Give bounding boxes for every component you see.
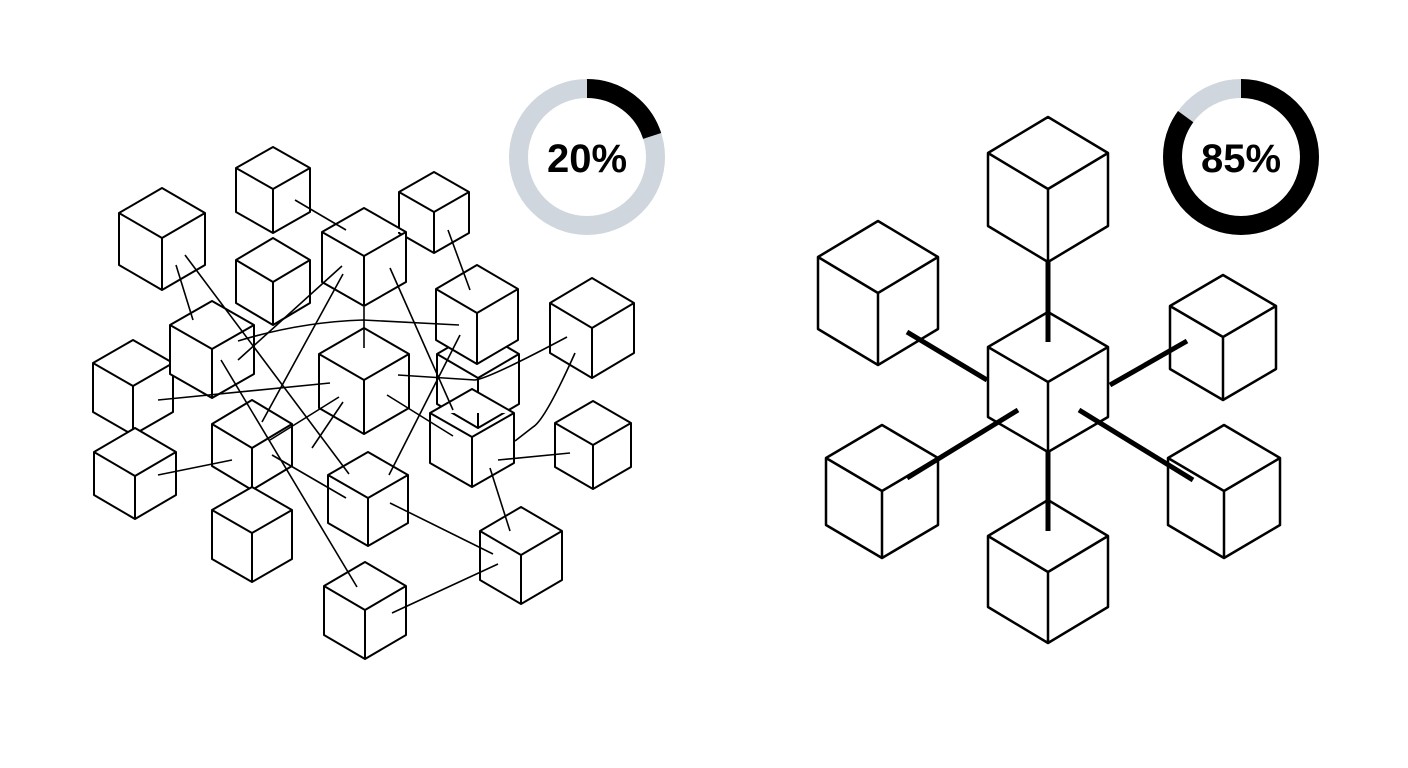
panel: hub network (right) [818,117,1280,643]
label: 85%: 85% [1201,137,1281,181]
donut chart: 85% [1172,88,1310,226]
panel: decentralized network (left) [93,147,634,659]
tangled connection lines [158,200,575,613]
donut chart: 20% [518,88,656,226]
hub spokes [907,262,1193,531]
hub cubes [818,117,1280,643]
label: 20%: 20% [547,137,627,181]
cube cluster left [93,147,634,659]
